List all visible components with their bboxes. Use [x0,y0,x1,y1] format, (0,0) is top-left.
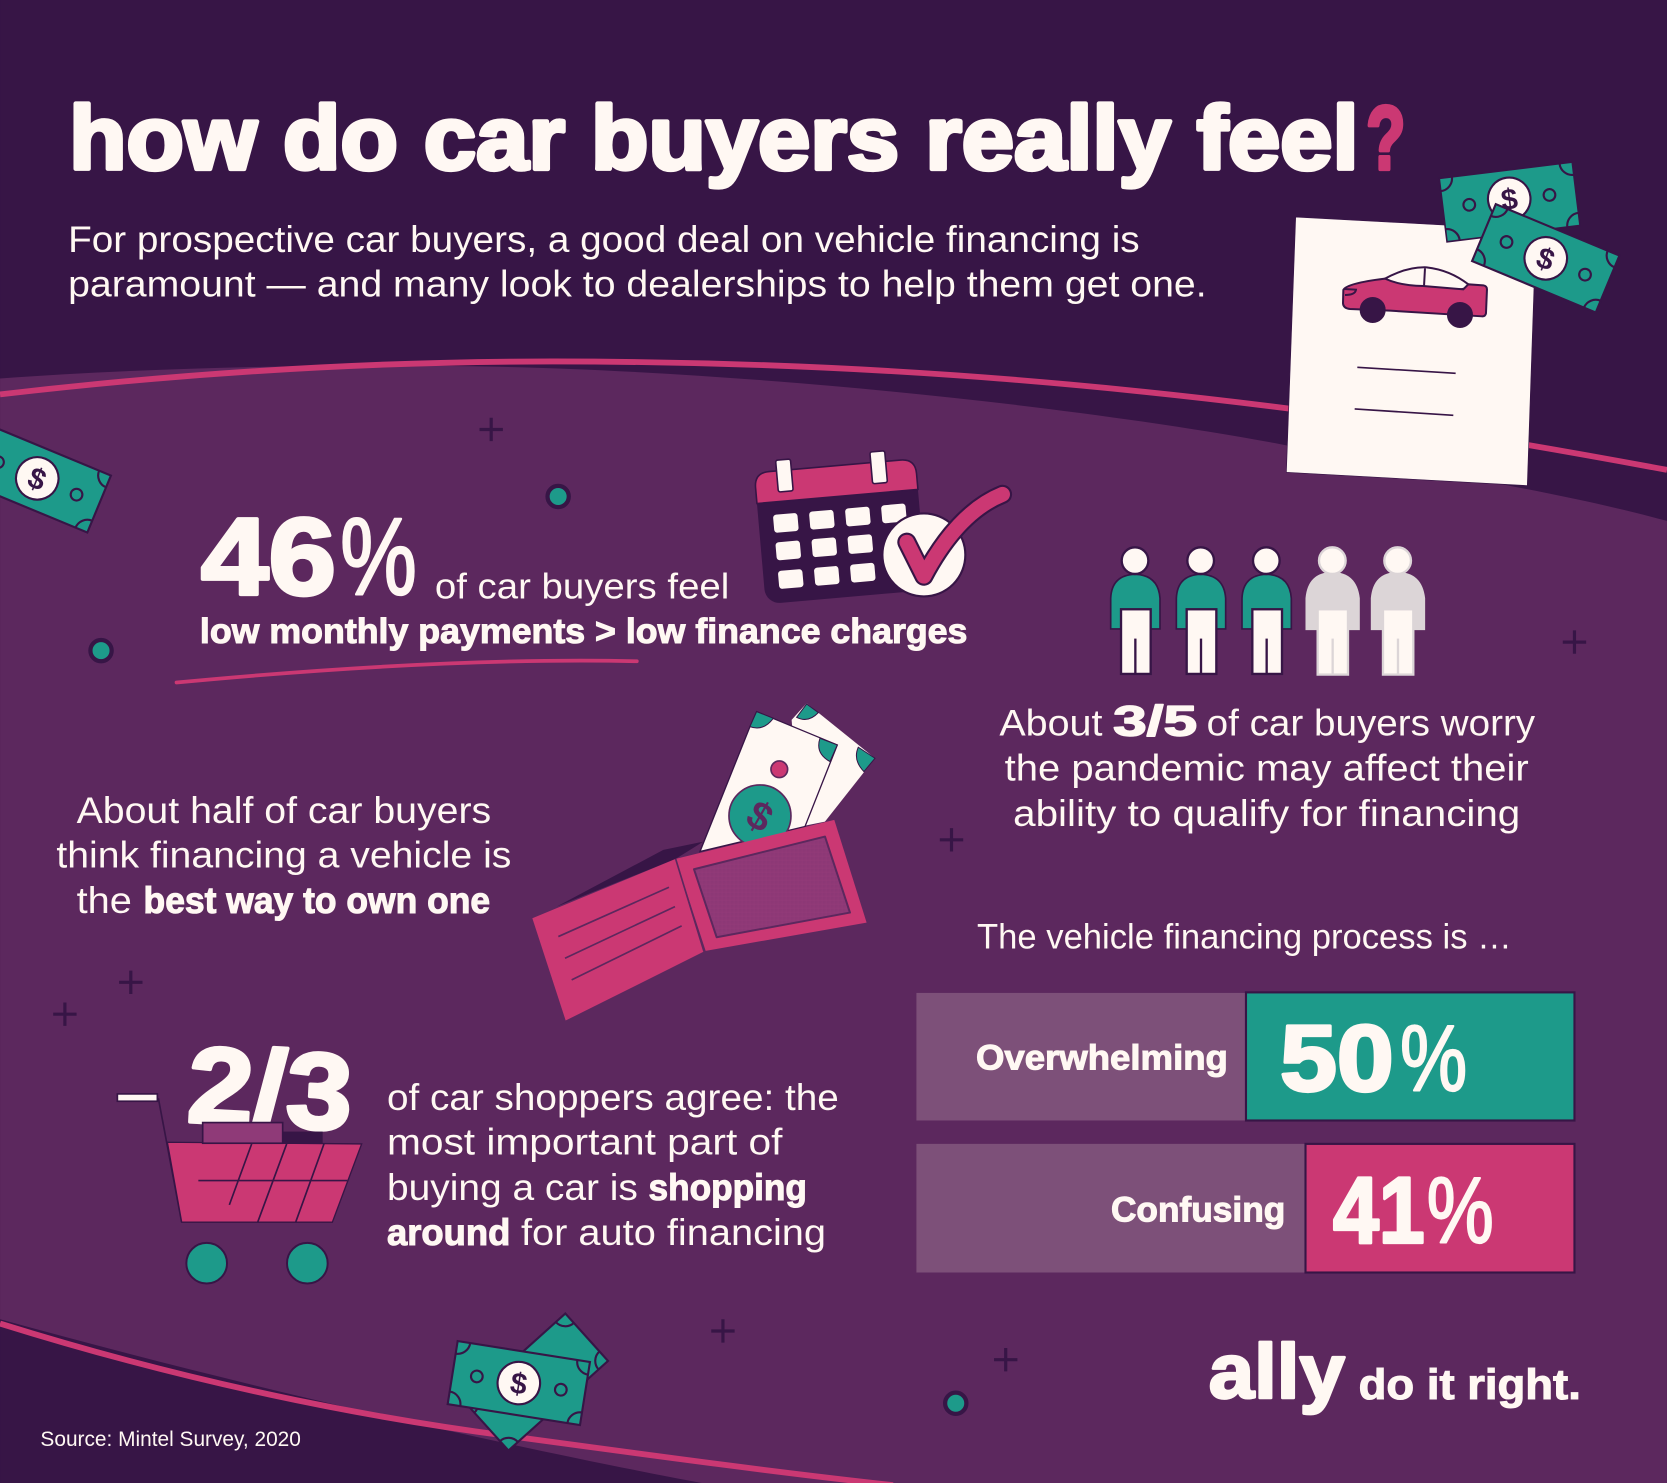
text: best way to own: About half of car buyers [77,790,491,831]
text: 3/5 worry: the pandemic may affect their [1005,747,1529,788]
text: shopping around: most important part of [387,1122,783,1163]
bar: overwhelming 50%: 50 [1280,1006,1394,1111]
logo [1209,1330,1581,1415]
bar: overwhelming 50%: Overwhelming [976,1038,1228,1077]
icon: money bill left edge: $ [23,461,51,498]
text: 3/5 worry: ability to qualify for financing [1013,793,1520,834]
text: 3/5 worry: 3/5 [1113,699,1197,746]
bottom pink curve [0,1324,893,1483]
source: Source: Mintel Survey, 2020 [40,1427,301,1451]
text: shopping around: for auto financing [521,1212,826,1253]
bar: overwhelming 50%: % [1400,1006,1467,1111]
person 3 [1242,547,1291,674]
logo: ally [1209,1330,1345,1415]
text: shopping around [387,1077,839,1253]
decorative plus signs [53,418,1586,1371]
icon: money bill left edge [0,424,111,532]
text: 3/5 worry [999,699,1536,834]
icon: five people [1111,547,1424,675]
person 1 [1111,547,1160,674]
icon: shopping cart with 2/3 [117,1024,362,1284]
icon: car [1343,267,1487,327]
icon: money bill front: $ [1532,241,1559,278]
stat: 46%: % [340,496,417,618]
text: shopping around: buying a car is [387,1167,638,1208]
text: shopping around: of car shoppers agree: the [387,1077,839,1118]
bar: confusing 41% [916,1144,1574,1273]
icon: money bill front [1472,204,1619,313]
person 4 [1307,547,1359,675]
icon: document with car [1286,217,1536,486]
person 5 [1372,547,1424,675]
intro text: For prospective car buyers, a good deal on vehicle financing is [68,218,1140,260]
icon: wallet with cash: $ [739,792,780,841]
text: shopping around: around [387,1212,510,1253]
underline [177,661,637,682]
text: best way to own: think financing a vehicle is [56,834,511,875]
icon: money bill behind [1439,162,1580,242]
logo: do it right. [1359,1362,1581,1409]
text: 3/5 worry: About [999,703,1102,744]
stat: 46% [200,496,967,651]
icon: calendar with check [753,448,1003,604]
icon: money bills bottom: $ [508,1367,530,1402]
intro text: paramount — and many look to dealerships to help them get one. [68,263,1207,305]
person 2 [1176,547,1226,674]
text: best way to own: the [77,880,132,921]
top pink curve [0,361,1667,470]
title: how do car buyers really feel [69,88,1359,189]
bar: confusing 41%: Confusing [1111,1190,1285,1229]
text: shopping around: shopping [649,1167,807,1208]
stat: 46%: low monthly payments > low finance charges [200,612,967,651]
text: best way to own [56,790,511,921]
intro text [68,218,1207,305]
text: best way to own: best way to own one [144,880,490,921]
stat: 46%: of car buyers feel [435,566,729,607]
background: mid purple wave [0,366,1667,1483]
heading: financing process: The vehicle financing process is … [977,917,1512,956]
title: ? [1366,88,1405,189]
stat: 2/3: 2/3 [185,1024,356,1153]
stat: 46%: 46 [201,496,336,618]
icon: wallet with cash [532,703,875,1021]
bar: confusing 41%: % [1427,1158,1494,1263]
icon: money bills bottom [448,1313,608,1451]
decorative dots [90,486,966,1414]
icon: money bill behind: $ [1499,183,1520,217]
text: 3/5 worry: of car buyers worry [1207,703,1536,744]
bar: overwhelming 50% [916,992,1574,1120]
bar: confusing 41%: 41 [1333,1158,1425,1263]
